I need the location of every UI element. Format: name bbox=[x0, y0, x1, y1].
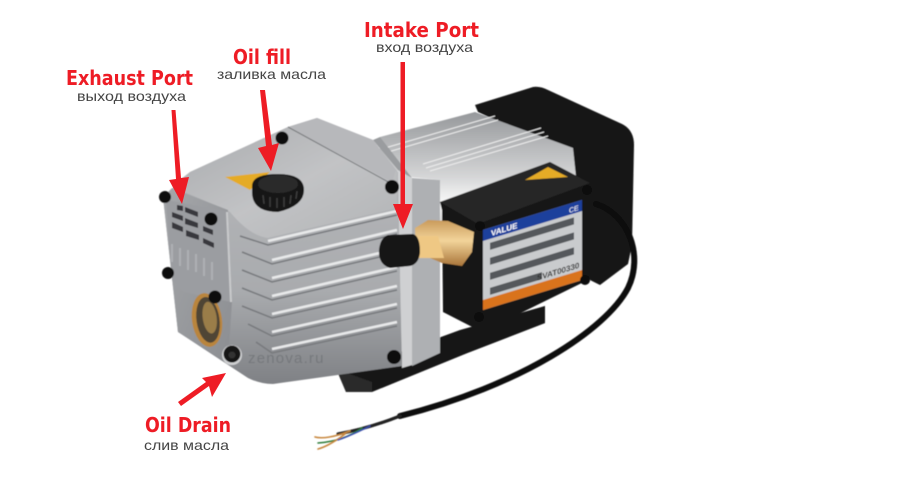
arrow: oil fill bbox=[258, 90, 279, 171]
black junction box bbox=[440, 162, 592, 332]
watermark: zenova.ru bbox=[248, 350, 325, 367]
label: intake port: вход воздуха bbox=[376, 39, 473, 55]
label: exhaust port: выход воздуха bbox=[77, 88, 186, 104]
oil fill cap bbox=[252, 174, 304, 212]
label: intake port bbox=[364, 18, 479, 55]
box screws bbox=[474, 185, 592, 322]
power cable bbox=[315, 204, 634, 449]
housing silhouette bbox=[163, 118, 402, 384]
arrow: intake port bbox=[393, 62, 413, 229]
label: oil fill: Oil fill bbox=[233, 45, 291, 69]
warning triangle bbox=[225, 172, 270, 190]
label: oil fill: заливка масла bbox=[217, 66, 326, 82]
label: exhaust port bbox=[66, 66, 193, 104]
pump housing bbox=[159, 118, 402, 384]
nameplate bbox=[483, 200, 582, 310]
cover groove bbox=[288, 127, 392, 184]
motor silver cylinder bbox=[380, 112, 580, 240]
pump photo illustration bbox=[159, 87, 634, 449]
label: oil drain: слив масла bbox=[144, 437, 229, 453]
motor black end cap bbox=[475, 87, 634, 285]
raised vent plate bbox=[166, 200, 231, 302]
brass fitting bbox=[415, 220, 474, 266]
arrow: exhaust port bbox=[169, 110, 189, 204]
oil drain plug bbox=[222, 345, 242, 365]
nameplate: VALUE bbox=[491, 221, 518, 238]
warning triangle on box bbox=[525, 167, 568, 180]
nameplate: CE bbox=[569, 204, 579, 215]
cooling ribs bbox=[240, 211, 397, 353]
plate edge highlight bbox=[227, 212, 231, 302]
base foot bbox=[335, 306, 545, 392]
end plate bbox=[163, 188, 232, 362]
intake port cap bbox=[379, 234, 420, 268]
oil sight glass bbox=[188, 291, 226, 349]
bolts bbox=[159, 132, 401, 364]
arrow: oil drain bbox=[178, 373, 226, 406]
label: intake port: Intake Port bbox=[364, 18, 479, 42]
nameplate: SVAT00330 bbox=[537, 261, 580, 283]
label: oil drain: Oil Drain bbox=[145, 413, 231, 437]
silver divider plate bbox=[373, 137, 545, 368]
housing top face bbox=[172, 118, 397, 238]
label: oil drain bbox=[144, 413, 231, 453]
vent slots bbox=[172, 205, 214, 248]
rear cover strip bbox=[288, 118, 396, 182]
embossed logo bbox=[172, 244, 212, 280]
label: oil fill bbox=[217, 45, 326, 82]
label: exhaust port: Exhaust Port bbox=[66, 66, 193, 90]
